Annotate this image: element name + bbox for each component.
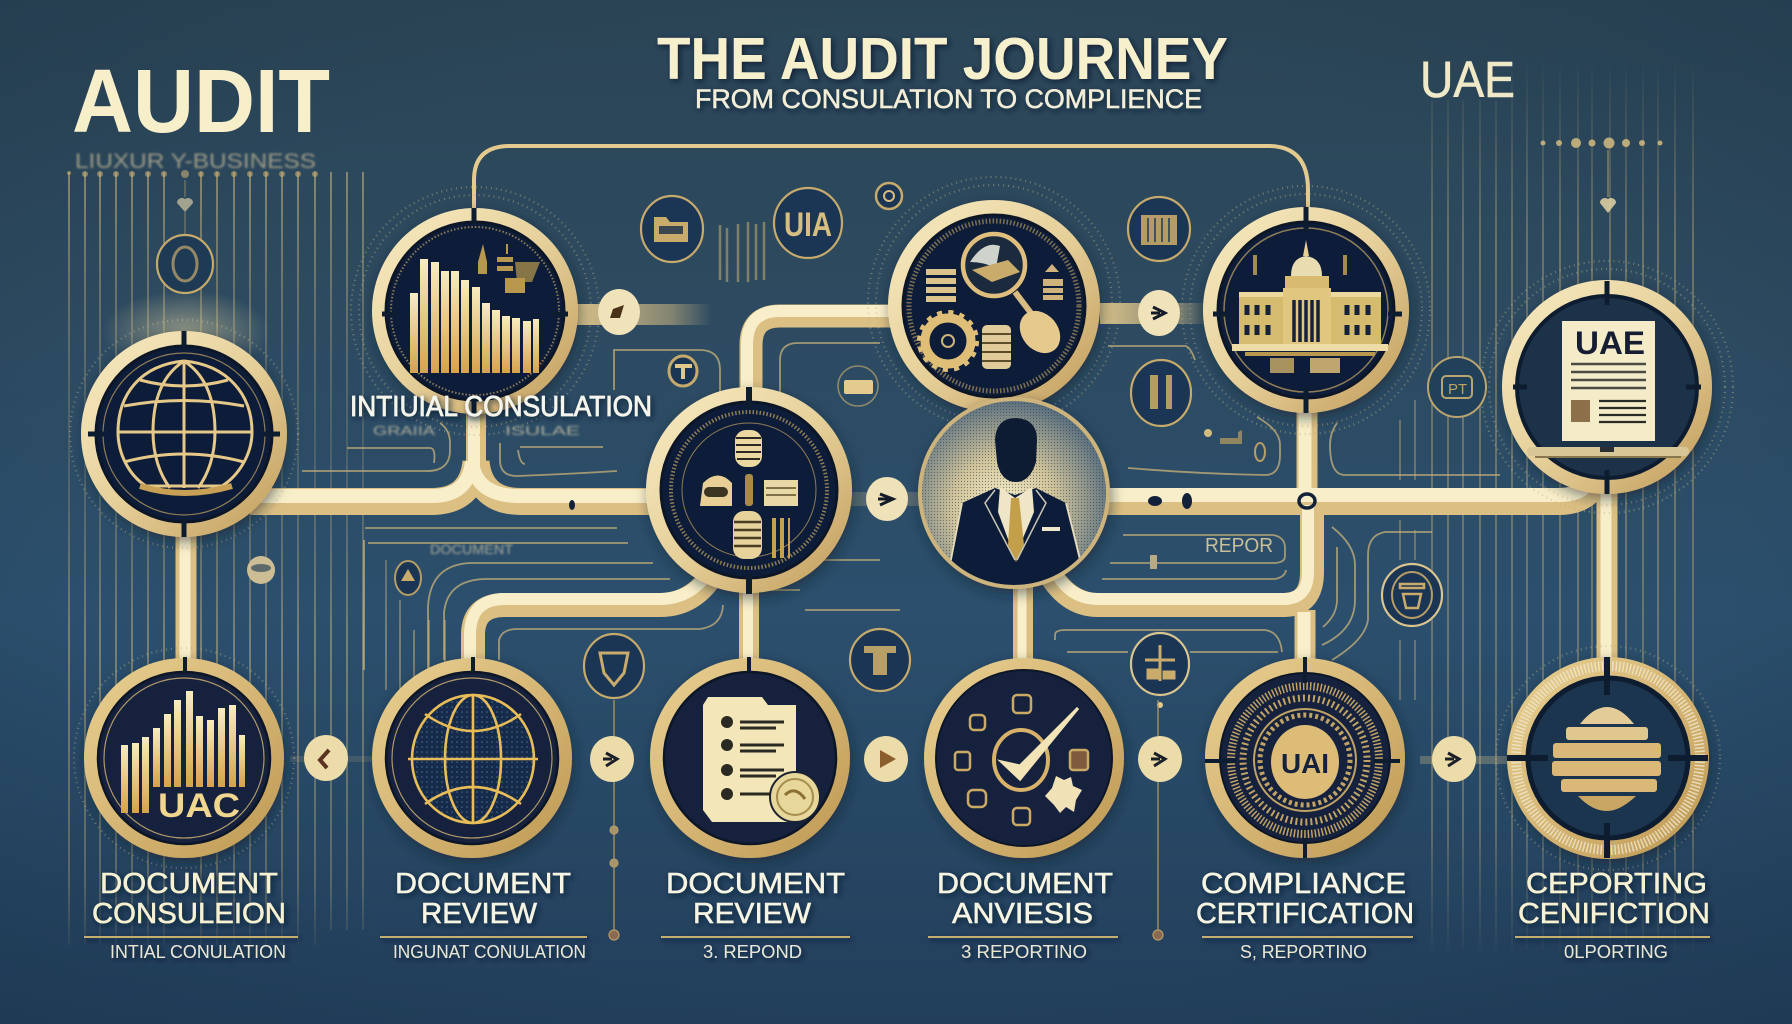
icon: stripes xyxy=(1552,707,1661,811)
node: UAE certification seal xyxy=(1205,657,1405,858)
node: magnifier xyxy=(888,200,1100,412)
medallion: folder xyxy=(641,196,703,262)
step label 2: REVIEW xyxy=(421,898,538,930)
step label 3 xyxy=(661,868,850,962)
icon: gear blob xyxy=(1045,776,1082,813)
icon: wire globe xyxy=(118,361,252,493)
icon: seal xyxy=(770,772,820,822)
medallion: pt xyxy=(1428,357,1486,417)
faint sublabels xyxy=(373,423,581,438)
icon: stack center xyxy=(982,325,1011,369)
label: initial consultation xyxy=(350,391,652,438)
icon: checklist page xyxy=(703,697,796,822)
pipe layer: cream highlight xyxy=(185,311,1606,665)
drop ornaments right xyxy=(1540,138,1662,213)
medallion: tray xyxy=(838,366,878,406)
strand of beads xyxy=(609,700,1163,940)
medallion: small emblem xyxy=(876,183,902,209)
node: checklist xyxy=(650,657,850,858)
medallion: pt: PT xyxy=(1448,381,1467,398)
arrow: coins to person xyxy=(866,477,908,521)
node: report document xyxy=(1502,280,1712,494)
node: globe xyxy=(81,331,287,537)
step label 1 xyxy=(84,868,298,962)
arrow: bottom three xyxy=(864,736,908,782)
icon: stack right xyxy=(1043,264,1063,300)
brand: audit: AUDIT xyxy=(72,52,330,152)
arrow: bottom one xyxy=(304,735,348,781)
step label 2: DOCUMENT xyxy=(395,868,571,900)
glow behind globe xyxy=(101,290,271,374)
top thin connector xyxy=(474,146,1308,208)
medallion: key xyxy=(669,356,697,386)
faint sublabels: ISULAE xyxy=(505,423,581,438)
step label 6: CEPORTING xyxy=(1526,868,1707,900)
icon: stack top xyxy=(735,430,762,467)
node: bars with UAE xyxy=(84,657,284,858)
step label 4: DOCUMENT xyxy=(937,868,1113,900)
step label 1: CONSULEION xyxy=(92,898,286,930)
step label 3: DOCUMENT xyxy=(666,868,845,900)
step label 5: S, REPORTINO xyxy=(1240,942,1367,962)
icon: skyline xyxy=(478,244,540,293)
icon: stack bottom xyxy=(733,511,762,559)
step label 6: 0LPORTING xyxy=(1564,942,1668,962)
icon: bar chart xyxy=(410,259,539,373)
medallion: audit seal xyxy=(157,235,213,293)
main connectors xyxy=(185,311,1607,665)
node: person xyxy=(918,397,1110,600)
faint document label: DOCUMENT xyxy=(430,541,513,557)
icon: check circle xyxy=(994,708,1078,790)
icon text: UAE: UAC xyxy=(158,787,240,825)
joints on pipes xyxy=(569,493,1315,510)
arrow: bottom four xyxy=(1138,736,1182,782)
arrow: bottom two xyxy=(590,736,634,782)
icon: bars xyxy=(121,691,245,813)
medallion: archive xyxy=(1128,197,1190,261)
step label 1: INTIAL CONULATION xyxy=(110,942,286,962)
icon: document xyxy=(1562,321,1655,441)
step label 3: REVIEW xyxy=(693,898,812,930)
dotted halos xyxy=(70,177,1733,870)
icon: stack left xyxy=(926,269,956,302)
medallion: pillar xyxy=(850,629,910,691)
icon: pouch right xyxy=(764,480,798,506)
icon: document: UAE xyxy=(1575,325,1645,361)
icon: lens xyxy=(963,234,1069,361)
arrow: bottom five xyxy=(1432,736,1476,782)
medallion: columns xyxy=(720,222,764,282)
icon: seal rings xyxy=(1231,686,1379,834)
arrow: consult to magnifier xyxy=(598,289,640,335)
brand tagline: LIUXUR Y-BUSINESS xyxy=(75,150,316,173)
medallion: shield xyxy=(584,634,644,698)
node: coin stacks xyxy=(646,387,852,594)
medallion: UAE badge xyxy=(774,188,842,258)
medallion: book xyxy=(1131,360,1191,426)
pipe layer: gold base xyxy=(186,316,1607,665)
title: THE AUDIT JOURNEY xyxy=(657,26,1228,92)
vertical lines left xyxy=(69,172,445,945)
icon: tools xyxy=(772,518,790,558)
step label 1: DOCUMENT xyxy=(100,868,278,900)
medallion: scales xyxy=(1131,633,1189,695)
drop ornaments left xyxy=(67,170,318,234)
icon: globe xyxy=(408,695,538,823)
icon: center disc xyxy=(1271,725,1339,799)
medallion: UAE badge: UIA xyxy=(784,206,832,244)
icon: center candle xyxy=(745,474,753,506)
icon: palace building xyxy=(1232,240,1388,373)
faint sublabels: GRAIIA xyxy=(373,423,435,438)
connector tails xyxy=(290,303,1510,764)
step label 4: 3 REPORTINO xyxy=(961,942,1087,962)
node: globe review xyxy=(372,657,572,858)
region label: uae: UAE xyxy=(1420,51,1515,108)
small medallions xyxy=(157,183,1486,940)
medallion: small ornaments xyxy=(247,429,1265,708)
step label 6: CENIFICTION xyxy=(1518,898,1710,930)
icon: laptop base xyxy=(1527,447,1689,458)
step label 5 xyxy=(1196,868,1414,962)
subtitle: FROM CONSULATION TO COMPLIENCE xyxy=(695,84,1202,114)
faint report label: REPOR xyxy=(1205,535,1273,557)
step label 5: CERTIFICATION xyxy=(1196,898,1414,930)
arrow: magnifier to palace xyxy=(1138,290,1180,336)
step label 3: 3. REPOND xyxy=(703,942,802,962)
icon: center disc: UAI xyxy=(1281,748,1329,779)
node: striped hive xyxy=(1507,657,1709,859)
node: palace xyxy=(1203,207,1409,413)
label: initial consultation: INTIUIAL CONSULATION xyxy=(350,391,652,423)
step label 2: INGUNAT CONULATION xyxy=(393,942,586,962)
icon: pouch left xyxy=(700,476,732,506)
medallion: cup xyxy=(1382,564,1442,626)
icon: satellites xyxy=(955,695,1088,825)
icon: suited silhouette xyxy=(950,418,1080,585)
vertical lines right xyxy=(1400,60,1693,950)
step label 6 xyxy=(1515,868,1710,962)
thin circuit traces xyxy=(302,343,1500,670)
step label 2 xyxy=(380,868,587,962)
icon: gear xyxy=(920,313,976,369)
step label 5: COMPLIANCE xyxy=(1201,868,1406,900)
step label 4: ANVIESIS xyxy=(952,898,1093,930)
arrow buttons xyxy=(304,289,1476,782)
step label 4 xyxy=(928,868,1118,962)
node: checkmark analysis xyxy=(924,658,1124,858)
node: declining bars xyxy=(372,208,578,414)
